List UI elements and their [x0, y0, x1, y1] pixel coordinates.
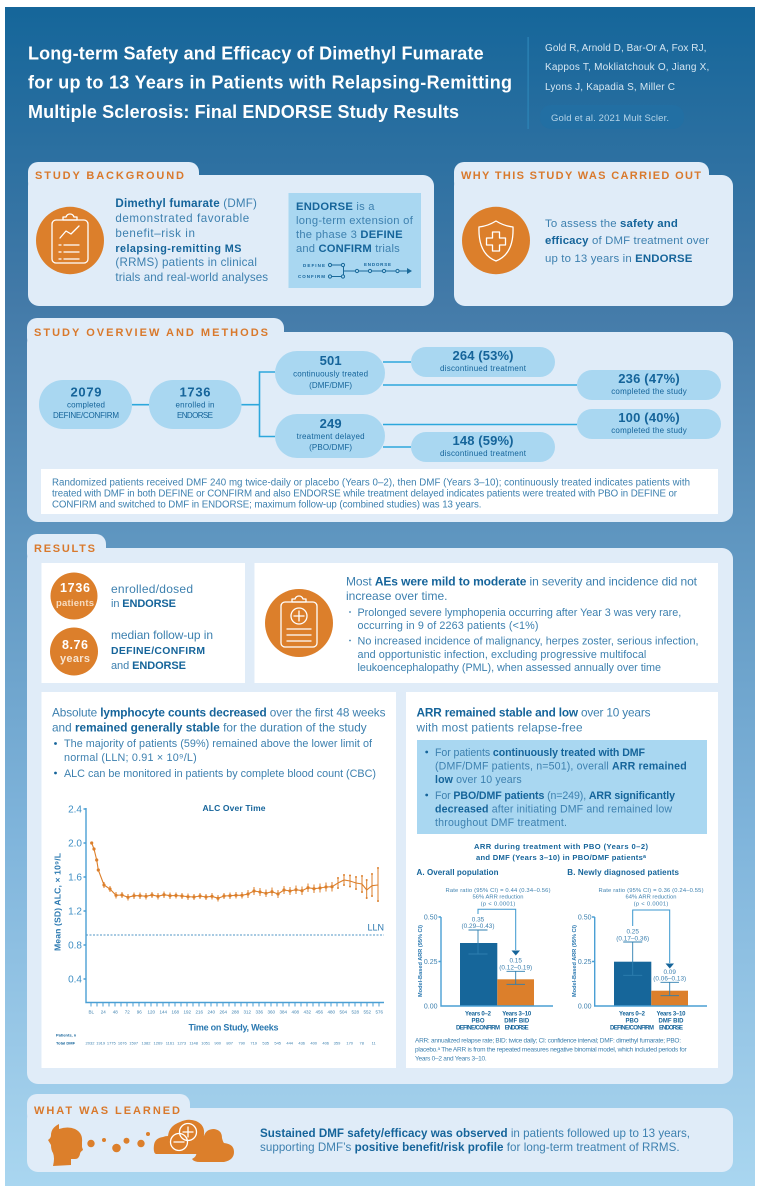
- text: lymphocyte findings: and remained generally stable for the duration of the study: [52, 720, 367, 734]
- bar chart B: newly diagnosed patients: Years 3–10: [656, 1012, 686, 1018]
- flow: 249 treatment delayed: treatment delayed: [297, 432, 365, 441]
- stat: 8.76 years: 8.76: [62, 638, 88, 652]
- bar chart A: overall population: 0.15: [509, 958, 522, 964]
- flow: 264 discontinued: 264 (53%): [452, 348, 514, 363]
- bar chart B: newly diagnosed patients: [567, 868, 707, 1032]
- bar chart B: newly diagnosed patients: PBO: [625, 1018, 639, 1024]
- heading: ARR: with most patients relapse-free: [416, 720, 583, 734]
- x axis: 504: [340, 1010, 348, 1015]
- heading: why this study: WHY THIS STUDY WAS CARRIED OUT: [461, 170, 701, 182]
- x axis: 336: [256, 1010, 264, 1015]
- flow: 148 discontinued: 148 (59%): [452, 433, 514, 448]
- stat: 1736 patients: 1736: [60, 581, 90, 595]
- stat text: enrolled: in ENDORSE: [111, 598, 176, 610]
- title: for up to 13 Years in Patients with Relapsing-Remitting: [28, 72, 512, 92]
- flow: 100 completed: completed the study: [611, 426, 687, 435]
- icon: shield with cross: [462, 207, 530, 274]
- x axis: 408: [292, 1010, 300, 1015]
- flow: 264 discontinued: [411, 347, 555, 377]
- bar chart B: newly diagnosed patients: 0.25: [578, 959, 592, 966]
- table: patients at risk: 170: [346, 1040, 354, 1046]
- table: patients at risk: 11: [372, 1040, 377, 1046]
- table: patients at risk: 78: [359, 1040, 365, 1046]
- citation pill: [540, 105, 684, 129]
- bar chart A: overall population: 56% ARR reduction: [472, 894, 524, 900]
- text: lymphocyte findings: The majority of patients (59%) remained above the lower limit of: [64, 738, 373, 750]
- bar chart B: newly diagnosed patients: 0.09: [663, 969, 676, 976]
- bar chart B: newly diagnosed patients: 0.50: [578, 914, 592, 922]
- x axis: 576: [376, 1010, 384, 1015]
- x axis: 384: [280, 1010, 288, 1015]
- stat text: follow-up: [111, 628, 213, 672]
- text: lymphocyte findings: normal (LLN; 0.91 × 10⁹/L): [64, 752, 197, 764]
- text: adverse events: leukoencephalopathy (PML), when assessed annually over time: [358, 662, 661, 674]
- text: lymphocyte findings: Absolute lymphocyte counts decreased over the first 48 weeks: [52, 706, 386, 720]
- table: patients at risk: 1919: [96, 1040, 106, 1046]
- stat: 8.76 years: years: [60, 653, 90, 665]
- flow: 501 continuously treated: 501: [320, 353, 342, 368]
- flow: 249 treatment delayed: 249: [320, 416, 342, 431]
- text: conclusion: supporting DMF’s positive benefit/risk profile for long-term treatment of RRMS.: [260, 1141, 680, 1154]
- text: adverse events: and opportunistic infection, excluding progressive multifocal: [358, 649, 646, 661]
- x axis: Time on Study, Weeks: [188, 1022, 278, 1032]
- title: [28, 44, 512, 122]
- card: lymphocyte counts: [42, 692, 396, 1068]
- bar chart A: overall population: PBO: [471, 1018, 485, 1024]
- callout: ARR bullets: For PBO/DMF patients (n=249), ARR significantly: [435, 790, 675, 802]
- authors: Lyons J, Kapadia S, Miller C: [545, 82, 675, 93]
- table: patients at risk: 444: [286, 1040, 294, 1046]
- table: patients at risk: 406: [322, 1040, 330, 1046]
- x axis: 432: [304, 1010, 312, 1015]
- callout: ARR bullets: throughout DMF treatment.: [435, 817, 567, 829]
- footnote: ARR: annualized relapse rate; BID: twice daily; CI: confidence interval; DMF: dimethyl fumarate; PBO:: [415, 1038, 681, 1044]
- diagram: trial timeline: ENDORSE: [364, 262, 391, 267]
- y axis: 1.6: [68, 872, 82, 884]
- heading: ARR: ARR remained stable and low over 10 years: [416, 706, 651, 720]
- heading: what was learned: WHAT WAS LEARNED: [34, 1105, 180, 1117]
- text: why: up to 13 years in ENDORSE: [545, 253, 693, 265]
- table: patients at risk: 2032: [86, 1040, 95, 1046]
- table: patients at risk: Total DMF: [56, 1040, 76, 1046]
- table: patients at risk: [56, 1032, 377, 1046]
- title: Multiple Sclerosis: Final ENDORSE Study Results: [28, 102, 459, 122]
- heading: results: RESULTS: [34, 543, 95, 555]
- table: patients at risk: 1775: [107, 1040, 117, 1046]
- flow: 100 completed: 100 (40%): [618, 410, 680, 425]
- icon: clipboard chart: [36, 207, 104, 274]
- stat: 8.76 years: [50, 628, 98, 676]
- y axis: [52, 804, 384, 1002]
- bar chart A: overall population: A. Overall population: [416, 868, 499, 877]
- bar chart A: overall population: 0.00: [424, 1004, 438, 1010]
- y axis: 1.2: [68, 906, 82, 918]
- bar chart A: overall population: (p < 0.0001): [481, 902, 515, 908]
- callout: ARR bullets: (DMF/DMF patients, n=501), overall ARR remained: [435, 760, 687, 772]
- x axis: 216: [196, 1010, 204, 1015]
- x axis: 456: [316, 1010, 324, 1015]
- panel: study overview and methods: [27, 318, 733, 522]
- flow: 264 discontinued: discontinued treatment: [440, 364, 527, 373]
- table: patients at risk: 900: [214, 1040, 222, 1046]
- authors: Gold R, Arnold D, Bar-Or A, Fox RJ,: [545, 43, 706, 54]
- panel: why this study was carried out: [454, 162, 733, 306]
- table: patients at risk: 1676: [118, 1040, 128, 1046]
- bar chart B: newly diagnosed patients: Model-Based ARR (95% CI): [572, 925, 578, 997]
- card: annualized relapse rate: [406, 692, 718, 1068]
- bar chart B: newly diagnosed patients: B. Newly diagnosed patients: [567, 868, 680, 877]
- text: conclusion: [260, 1127, 690, 1154]
- x axis: 168: [172, 1010, 180, 1015]
- text: background: demonstrated favorable: [115, 212, 249, 225]
- LLN reference line: LLN: [367, 922, 384, 932]
- text: adverse events: increase over time.: [346, 589, 448, 603]
- bar chart A: overall population: Years 3–10: [502, 1012, 532, 1018]
- bar chart B: newly diagnosed patients: DEFINE/CONFIRM: [610, 1026, 654, 1032]
- footnote: Years 0–2 and Years 3–10.: [415, 1056, 487, 1062]
- callout: ENDORSE extension: and CONFIRM trials: [296, 243, 400, 255]
- citation pill: Gold et al. 2021 Mult Scler.: [551, 113, 669, 124]
- icon: clipboard with plus: [265, 589, 333, 657]
- text: lymphocyte findings: ALC can be monitored in patients by complete blood count (CBC): [64, 768, 376, 780]
- x axis: 96: [137, 1010, 142, 1015]
- flow: 236 completed: [577, 370, 721, 400]
- bar chart A: overall population: [416, 868, 553, 1032]
- line chart: ALC over time: [52, 803, 384, 1046]
- text: why: efficacy of DMF treatment over: [545, 235, 709, 247]
- table: patients at risk: 1148: [189, 1040, 199, 1046]
- x axis: 312: [244, 1010, 252, 1015]
- y axis: 2.0: [68, 838, 82, 850]
- callout: ENDORSE extension: [288, 193, 421, 288]
- chart heading: ARR during treatment with PBO (Years 0–2): [474, 842, 648, 851]
- authors: Kappos T, Mokliatchouk O, Jiang X,: [545, 62, 709, 73]
- bar chart B: newly diagnosed patients: (0.06–0.13): [653, 976, 686, 982]
- table: patients at risk: 1597: [129, 1040, 139, 1046]
- x axis: 528: [352, 1010, 360, 1015]
- footnote: placebo.ᵃ The ARR is from the repeated measures negative binomial model, which included periods for: [415, 1046, 688, 1054]
- x axis: 288: [232, 1010, 240, 1015]
- y axis: Mean (SD) ALC, × 10⁹/L: [52, 853, 62, 951]
- stat text: enrolled: [111, 582, 193, 610]
- title: Long-term Safety and Efficacy of Dimethyl Fumarate: [28, 44, 484, 64]
- text: conclusion: Sustained DMF safety/efficacy was observed in patients followed up to 13 years,: [260, 1127, 690, 1140]
- text: lymphocyte findings: [52, 706, 386, 780]
- bar chart B: newly diagnosed patients: (0.17–0.36): [616, 936, 649, 942]
- text: background: [115, 197, 268, 284]
- heading: study background: STUDY BACKGROUND: [35, 170, 184, 182]
- x axis: 72: [125, 1010, 130, 1015]
- callout: ARR bullets: [417, 740, 707, 834]
- table: patients at risk: 1269: [154, 1040, 163, 1046]
- flow: 249 treatment delayed: (PBO/DMF): [309, 443, 352, 452]
- text: why: [545, 218, 709, 265]
- table: patients at risk: 535: [262, 1040, 270, 1046]
- stat: 1736 patients: patients: [56, 598, 94, 609]
- callout: ARR bullets: low over 10 years: [435, 774, 522, 786]
- text block: study methods note: Randomized patients received DMF 240 mg twice-daily or placebo (Years 0–2), then DMF (Years 3–10); continuously treated indicates patients with: [52, 478, 690, 488]
- flow: 1736 enrolled: enrolled in: [176, 400, 214, 410]
- chart title: ALC Over Time: [202, 803, 266, 813]
- bar chart A: overall population: 0.50: [424, 914, 438, 922]
- x axis: 192: [184, 1010, 192, 1015]
- text: background: benefit–risk in: [115, 227, 195, 240]
- text block: study methods note: treated with DMF in both DEFINE or CONFIRM and also ENDORSE while treatment delayed indicates patients were treated with PBO in DEFINE or: [52, 488, 678, 500]
- flow: 501 continuously treated: (DMF/DMF): [309, 381, 352, 390]
- y axis: 2.4: [68, 804, 82, 816]
- panel: what was learned: [27, 1094, 733, 1172]
- heading: ARR: [416, 706, 651, 734]
- x axis: 48: [113, 1010, 118, 1015]
- x axis: 24: [101, 1010, 106, 1015]
- flow: 1736 enrolled: ENDORSE: [177, 411, 213, 420]
- text block: study methods note: [41, 469, 718, 514]
- flow: 501 continuously treated: continuously treated: [293, 370, 368, 378]
- text: background: trials and real-world analyses: [115, 271, 268, 284]
- flow: 100 completed: [577, 409, 721, 439]
- bar chart B: newly diagnosed patients: ENDORSE: [659, 1026, 683, 1032]
- table: patients at risk: 400: [310, 1040, 318, 1046]
- bar chart B: newly diagnosed patients: 0.25: [626, 928, 639, 936]
- bar chart B: newly diagnosed patients: (p < 0.0001): [634, 902, 668, 908]
- x axis: 144: [160, 1010, 168, 1015]
- text: background: (RRMS) patients in clinical: [115, 256, 257, 269]
- table: patients at risk: 359: [334, 1040, 341, 1046]
- table: patients at risk: 1382: [142, 1040, 151, 1046]
- table: patients at risk: Patients, n: [56, 1032, 77, 1038]
- flow: 1736 enrolled: [149, 380, 242, 429]
- flow: 501 continuously treated: [275, 351, 385, 395]
- bar chart A: overall population: DEFINE/CONFIRM: [456, 1026, 500, 1032]
- flow: 236 completed: 236 (47%): [618, 371, 680, 386]
- flow: 2079 completed: 2079: [70, 384, 102, 400]
- flow: 249 treatment delayed: [275, 414, 385, 458]
- card: adverse events: [254, 563, 718, 683]
- callout: ARR bullets: For patients continuously treated with DMF: [435, 747, 646, 759]
- bar chart A: overall population: Model-Based ARR (95% CI): [418, 925, 424, 997]
- flow: 2079 completed: completed: [67, 400, 105, 410]
- table: patients at risk: 436: [298, 1040, 306, 1046]
- chart heading: [474, 842, 648, 862]
- diagram: trial timeline: [298, 262, 412, 279]
- bar chart A: overall population: ENDORSE: [505, 1026, 529, 1032]
- bar chart A: overall population: 0.25: [424, 959, 438, 966]
- text: adverse events: occurring in 9 of 2263 patients (<1%): [358, 620, 538, 632]
- card: key numbers: [42, 563, 245, 683]
- y axis: 0.8: [68, 940, 82, 952]
- flow: 2079 completed: DEFINE/CONFIRM: [53, 411, 119, 420]
- bar chart A: overall population: (0.29–0.43): [462, 923, 494, 930]
- text: adverse events: No increased incidence of malignancy, herpes zoster, serious infection,: [358, 636, 698, 648]
- x axis: 120: [148, 1010, 156, 1015]
- bar chart A: overall population: Years 0–2: [465, 1012, 492, 1018]
- text: adverse events: Prolonged severe lymphopenia occurring after Year 3 was very rare,: [358, 607, 681, 619]
- panel: study background: [28, 162, 434, 306]
- flow: 148 discontinued: [411, 432, 555, 462]
- authors: [545, 43, 709, 93]
- x axis: 552: [364, 1010, 372, 1015]
- x axis: 480: [328, 1010, 336, 1015]
- text: background: Dimethyl fumarate (DMF): [115, 197, 257, 210]
- table: patients at risk: 1051: [201, 1040, 211, 1046]
- bar chart B: newly diagnosed patients: 64% ARR reduction: [626, 894, 676, 900]
- stat: 1736 patients: [50, 572, 98, 620]
- text block: study methods note: CONFIRM and switched to DMF in ENDORSE; maximum follow-up (combined studies) was 13 years.: [52, 500, 482, 510]
- table: patients at risk: 807: [226, 1040, 234, 1046]
- table: patients at risk: 545: [274, 1040, 282, 1046]
- x axis: 264: [220, 1010, 228, 1015]
- flow: 236 completed: completed the study: [611, 387, 687, 396]
- x axis: 240: [208, 1010, 216, 1015]
- callout: ARR bullets: decreased after initiating DMF and remained low: [435, 804, 672, 816]
- y axis: 0.4: [68, 974, 82, 986]
- bar chart B: newly diagnosed patients: DMF BID: [658, 1018, 684, 1024]
- bar chart B: newly diagnosed patients: Years 0–2: [619, 1012, 646, 1018]
- callout: ENDORSE extension: long-term extension of: [296, 215, 414, 227]
- flow: 148 discontinued: discontinued treatment: [440, 449, 527, 458]
- text: adverse events: Most AEs were mild to moderate in severity and incidence did not: [346, 574, 698, 588]
- chart heading: and DMF (Years 3–10) in PBO/DMF patientsᵃ: [476, 853, 646, 862]
- diagram: trial timeline: CONFIRM: [298, 274, 325, 279]
- icon: head with thought clouds: [48, 1120, 234, 1166]
- heading: overview: STUDY OVERVIEW AND METHODS: [34, 327, 268, 339]
- table: patients at risk: 1273: [177, 1040, 187, 1046]
- text: background: relapsing-remitting MS: [115, 243, 241, 255]
- bar chart A: overall population: DMF BID: [504, 1018, 530, 1024]
- flow connectors: [132, 362, 577, 447]
- bar chart A: overall population: 0.35: [472, 916, 485, 924]
- panel: results: [27, 534, 733, 1084]
- x axis: BL: [89, 1010, 95, 1015]
- stat text: enrolled: enrolled/dosed: [111, 582, 193, 596]
- table: patients at risk: 719: [250, 1040, 258, 1046]
- table: patients at risk: 790: [238, 1040, 246, 1046]
- stat text: follow-up: DEFINE/CONFIRM: [111, 646, 205, 657]
- header: [28, 37, 709, 129]
- diagram: trial timeline: DEFINE: [303, 263, 325, 268]
- callout: ENDORSE extension: ENDORSE is a: [296, 201, 375, 213]
- bar chart A: overall population: (0.12–0.19): [499, 964, 532, 972]
- text: why: To assess the safety and: [545, 218, 678, 230]
- stat text: follow-up: and ENDORSE: [111, 660, 186, 672]
- x axis: 360: [268, 1010, 276, 1015]
- table: patients at risk: 1161: [166, 1040, 175, 1046]
- flow: 2079 completed: [39, 380, 132, 429]
- callout: ENDORSE extension: the phase 3 DEFINE: [296, 229, 403, 241]
- flow: 1736 enrolled: 1736: [180, 384, 210, 400]
- bar chart B: newly diagnosed patients: Rate ratio (95% CI) = 0.36 (0.24–0.55): [598, 888, 704, 894]
- stat text: follow-up: median follow-up in: [111, 628, 213, 642]
- x axis: [89, 1004, 384, 1032]
- data series: orange error bars and mean line: [92, 843, 378, 902]
- text: adverse events: [346, 574, 698, 674]
- bar chart A: overall population: Rate ratio (95% CI) = 0.44 (0.34–0.56): [446, 888, 551, 894]
- footnote: [415, 1038, 688, 1062]
- bar chart B: newly diagnosed patients: 0.00: [578, 1004, 592, 1010]
